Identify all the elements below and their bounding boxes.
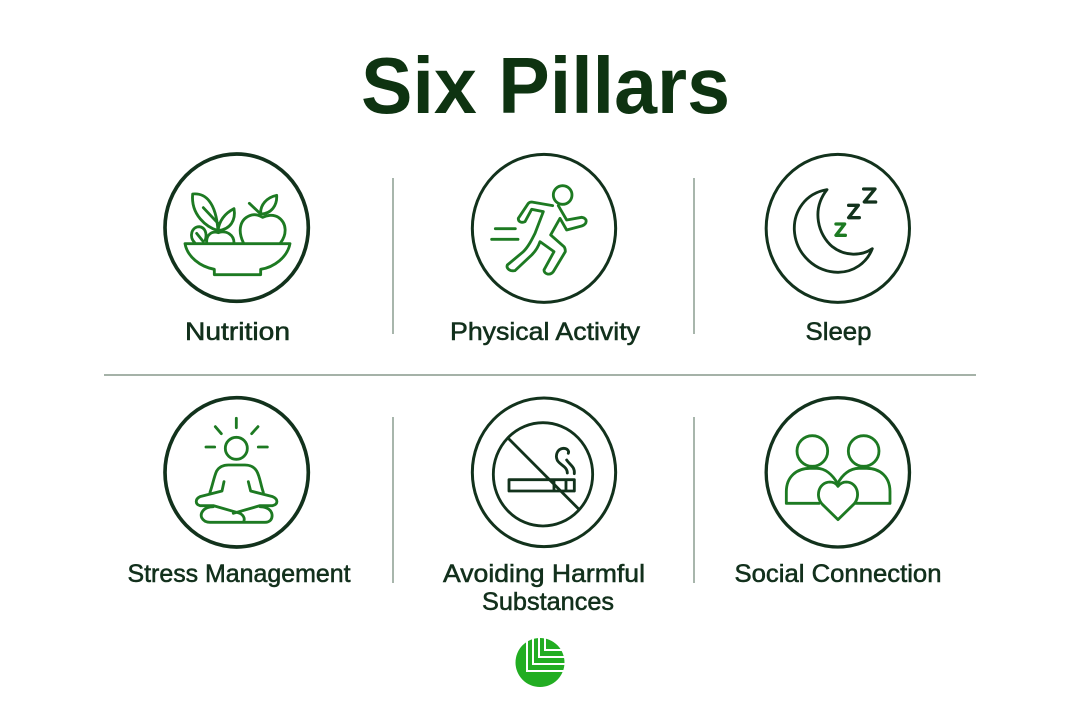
icon: moon and Z letters	[766, 154, 909, 302]
panel: nutrition	[165, 154, 308, 346]
icon: logo	[516, 636, 566, 687]
label: avoiding harmful substances: Avoiding Harmful	[443, 560, 645, 588]
icon: two people and heart	[766, 398, 909, 547]
label: nutrition: Nutrition	[185, 318, 290, 346]
label: social connection: Social Connection	[734, 560, 942, 588]
icon: fruit bowl	[165, 154, 308, 301]
label: avoiding harmful substances	[443, 560, 645, 616]
icon: runner	[472, 154, 616, 302]
label: sleep: Sleep	[806, 318, 872, 346]
label: stress management: Stress Management	[128, 560, 351, 588]
label: avoiding harmful substances: Substances	[482, 588, 614, 616]
panel: stress management	[128, 398, 351, 588]
icon: no smoking	[472, 398, 616, 547]
icon: meditation	[165, 398, 308, 547]
label: physical activity: Physical Activity	[450, 318, 641, 346]
panel: social connection	[734, 398, 942, 588]
panel: physical activity	[450, 154, 641, 346]
title: Six Pillars	[361, 41, 730, 130]
panel: avoiding harmful substances	[443, 398, 645, 616]
panel: sleep	[766, 154, 909, 346]
